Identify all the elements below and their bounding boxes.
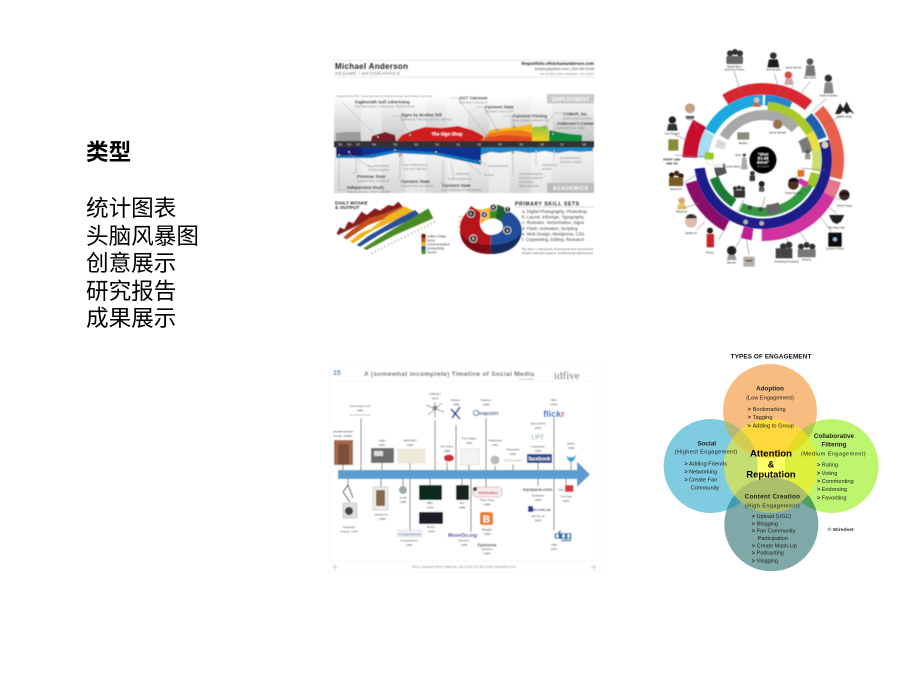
events below the line: digg (551, 542, 557, 546)
events above the line: radio (379, 438, 386, 442)
text: collaborative filtering: Voting (822, 471, 837, 477)
text: attention and reputation: Attention (750, 448, 792, 458)
text block: primary skill sets: e. Web Design, Wordpress, CSS (522, 232, 585, 236)
events below the line: telegraph (343, 525, 356, 529)
legend: ribbon chart: productivity (427, 246, 444, 250)
events above the line: Wikipedia (488, 438, 502, 442)
events below the line: 1998 (461, 543, 468, 547)
frame and header: A (somewhat incomplete) Timeline of Social Media (364, 371, 534, 378)
events below the line: telephone (374, 512, 388, 516)
events above the line: SecondLife (530, 422, 546, 426)
legend: ribbon chart: focus (427, 238, 435, 242)
events above the line: flickr (551, 398, 557, 402)
text: collaborative filtering: > (817, 495, 821, 501)
timeline band with years: '06 (540, 142, 544, 146)
text: collaborative filtering (801, 433, 866, 501)
academics labels: ELECTRONIC PUBLISHING (442, 188, 482, 192)
text: collaborative filtering: > (817, 463, 821, 469)
text: attention and reputation: & (768, 459, 775, 469)
text: collaborative filtering: Filtering (821, 442, 847, 449)
logos and images below the line: digg (554, 530, 572, 542)
text block: list of infographic types: 创意展示 (86, 251, 176, 276)
text: collaborative filtering: Commenting (822, 479, 854, 485)
events below the line: epinions (481, 547, 493, 551)
outer person labels: Bob Dylan (804, 76, 817, 80)
logos and images below the line: CompuServe (398, 532, 421, 536)
academics labels: WRITING (456, 172, 470, 176)
academics labels: PHOTOGRAPHY (519, 176, 543, 180)
outer person labels: Dance Stage (837, 114, 853, 118)
chart: daily intake and output ribbons (335, 200, 435, 253)
text: adoption: > (748, 407, 752, 413)
chart background with year columns (334, 95, 594, 193)
text block: primary skill sets: c. Illustrator, Vectorization, Signs (522, 220, 584, 225)
timeline arrow (338, 462, 590, 487)
academics labels: WEB DESIGN (519, 184, 539, 188)
events above the line: 2003 (535, 449, 542, 453)
header: name and contact (334, 60, 595, 78)
outer person labels: Chuck Berry (726, 164, 741, 168)
text: social: Adding Friends (689, 461, 727, 467)
logos and images below the line: del.icio.us (531, 507, 552, 512)
logos and images above the line (334, 402, 577, 465)
events below the line (340, 494, 572, 556)
employment labels: MARKETING / WEB (557, 126, 585, 130)
employment labels: Lapsed Area Plot : Area represents relative energy expenditure over time (336, 94, 433, 98)
events below the line: 2003 (535, 518, 542, 522)
events above the line: pneumatic post (350, 404, 370, 408)
circle: content creation (724, 477, 818, 571)
text block: primary skill sets: PRIMARY SKILL SETS (515, 202, 580, 208)
logos and images above the line: LIFE (532, 435, 544, 441)
text: content creation: Vlogging (757, 558, 778, 564)
events below the line: 1999 (484, 532, 491, 536)
people portraits (663, 49, 854, 267)
logos and images above the line: napster (479, 411, 500, 417)
outer person labels: START 1980 (663, 158, 681, 162)
header: name and contact: tunyboy@yahoo.com | 304-382-5145 (535, 67, 594, 71)
timeline band with years: '96 (347, 142, 351, 146)
timeline band with years: '03 (477, 142, 481, 146)
logos and images below the line (343, 485, 574, 548)
academics tag (547, 183, 594, 193)
outer person labels: Stevie Wonder (769, 130, 786, 134)
logos and images below the line: MoveOn.org (448, 533, 477, 539)
employment area plot: The Sign Shop (432, 132, 463, 136)
text block: primary skill sets: f. Copywriting, Editing, Research (522, 237, 585, 242)
academics labels: INDESIGN (542, 163, 557, 167)
timeline band with years: '99 (393, 142, 397, 146)
outer person labels: Nirvana (802, 258, 812, 262)
events below the line: ~ 1890 (376, 517, 386, 521)
header: name and contact: HC 63 BOX 2340 | ROMNEY, WV 26757 (540, 72, 594, 76)
outer person labels: Wu-Tang Clan (828, 225, 846, 229)
chart: daily intake and output ribbons: & OUTPUT (335, 205, 360, 211)
academics labels: VISUAL BASIC / PHOTOSHOP (347, 190, 390, 194)
text block: primary skill sets (515, 202, 594, 255)
outer person labels: James Brown (785, 65, 802, 69)
outer person labels: Snoop Dogg (837, 204, 852, 208)
employment labels: Anderson's Corner (557, 121, 594, 126)
events below the line: 2005 (563, 499, 570, 503)
start gap (683, 160, 723, 168)
outer person labels: Smashing Pumpkins (775, 260, 799, 264)
inner ring segments (689, 86, 837, 234)
text: content creation: > (752, 514, 755, 520)
logos and images below the line: myspace.com (523, 487, 552, 492)
outer person labels: Madonna (676, 210, 688, 214)
text: content creation (745, 493, 800, 564)
employment labels: Fairmont Printing (513, 114, 548, 118)
events below the line: IRC (459, 501, 465, 505)
text: content creation: > (752, 558, 755, 564)
events above the line: 1985 (444, 449, 451, 453)
events below the line: CompuServe (400, 538, 418, 542)
events above the line: 2004 (551, 402, 558, 406)
chart: 3D donut of skill sets: b (472, 236, 475, 241)
legend: ribbon chart (422, 234, 450, 254)
text: social: Community (691, 486, 719, 492)
text block: list of infographic types: 成果展示 (86, 306, 176, 331)
events below the line: 1988 (459, 506, 466, 510)
logos and images below the line: thirdvoice (478, 490, 498, 495)
text block: primary skill sets: Height indicates approx. professional deployment (522, 251, 593, 255)
academics labels: VECTORIZATION (403, 163, 428, 167)
academics labels: Fairmont State (442, 183, 471, 188)
rings (657, 54, 869, 266)
academics labels: GRADUATION (488, 164, 508, 168)
employment labels: Fairmont State (485, 104, 514, 110)
academics labels: TYPOGRAPHY (368, 168, 390, 172)
events above the line: 2002 (510, 452, 517, 456)
header: name and contact: Michael Anderson (335, 62, 408, 71)
academics area plot (336, 147, 593, 165)
employment labels: IADT Fairmont (459, 96, 488, 100)
outer person labels: Prince (706, 250, 714, 254)
logos and images above the line: W (444, 456, 451, 463)
events below the line: YouTube (560, 494, 572, 498)
employment labels: MAGAZINE DESIGN (563, 116, 592, 120)
academics labels: ILLUSTRATOR (368, 164, 390, 168)
events below the line: Blogger (482, 528, 492, 532)
center badge (750, 146, 776, 174)
events below the line: 1999 (484, 502, 491, 506)
academics labels: AUDIO (542, 167, 552, 171)
text: collaborative filtering: (Medium Engagement) (801, 452, 866, 458)
text: content creation: Upload (UGC) (757, 514, 792, 520)
logos and images below the line: B (483, 514, 490, 526)
text: social: > (684, 469, 688, 475)
chart: 3D donut of skill sets: a (506, 228, 509, 233)
events below the line: France, 1792 (340, 530, 358, 534)
timeline band with years: '08 (582, 142, 586, 146)
events below the line: 2004 (551, 547, 558, 551)
outer person labels: Public Enemy (785, 191, 802, 195)
timeline band with years: '05 (519, 142, 523, 146)
academics labels: Independent Study (347, 185, 385, 190)
timeline band with years: '00 (414, 142, 418, 146)
events above the line: USENET (429, 392, 441, 396)
academics labels: COMPUTER SCIENCE (357, 179, 389, 183)
outer person labels: Sound of Silver (826, 246, 844, 250)
timeline band with years: '04 (498, 142, 502, 146)
events above the line: Friendster (506, 448, 520, 452)
outer person labels: Vanilla Ice (685, 231, 698, 235)
text: collaborative filtering: Rating (822, 463, 838, 469)
timeline band with years: '07 (560, 142, 564, 146)
footer address (332, 564, 597, 570)
events above the line: 1969 (407, 443, 414, 447)
text block: list of infographic types: 头脑风暴图 (86, 224, 199, 249)
employment labels: SCORECARDS / SIGNAGE / PERIODICAL (355, 104, 415, 108)
outer person labels: Blondie (727, 260, 737, 264)
text: content creation: Create Mash-Up (757, 543, 797, 549)
connector lines (675, 72, 843, 255)
text: social: (Highest Engagement) (675, 449, 737, 455)
circle: adoption (723, 364, 817, 458)
academics labels: WORDPRESS (560, 156, 580, 160)
frame and header: idfive (554, 370, 580, 382)
events above the line: 2006 (568, 446, 575, 450)
employment labels: PRE-PRESS OPERATOR (513, 118, 550, 122)
events above the line: 2001 (492, 443, 499, 447)
employment labels: ADJUNCT FACULTY (485, 110, 514, 114)
events above the line: 1865 (357, 408, 364, 412)
events above the line: 1891 (379, 443, 386, 447)
academics labels: PHOTOGRAPHY (448, 177, 472, 181)
frame and header (330, 365, 600, 572)
outer person labels: God Only Knows (724, 68, 745, 72)
circle: collaborative filtering (785, 419, 879, 513)
academics labels: INFOGRAPHICS (519, 172, 543, 176)
text: adoption: > (748, 423, 752, 429)
events below the line: email (399, 496, 407, 500)
chart: 3D donut of skill sets: d (483, 212, 486, 217)
text: adoption: Adoption (756, 386, 784, 393)
academics labels: COLOR THEORY (403, 167, 428, 171)
center badge: "What (758, 152, 769, 156)
text: adoption: Bookmarking (753, 407, 786, 413)
text: content creation: Blogging (757, 521, 778, 527)
employment labels: COMAR, Inc. (563, 112, 588, 116)
employment tag: EMPLOYMENT (552, 97, 589, 103)
panel: Michael Anderson resume infographic (334, 60, 595, 255)
employment labels (336, 94, 594, 130)
frame and header: 15 (333, 370, 341, 377)
outer person labels: Beatles (739, 141, 748, 145)
text: content creation: Content Creation (745, 493, 800, 500)
text block: list of infographic types: 统计图表 (86, 196, 176, 221)
legend: ribbon chart: communication (427, 242, 450, 246)
text block: list of infographic types: 研究报告 (86, 279, 176, 304)
timeline band with years: '02 (456, 142, 460, 146)
outer ring segments (657, 54, 869, 266)
events above the line: 2003 (535, 426, 542, 430)
events above the line: Persia, 550BC (333, 434, 354, 438)
academics labels: COMPUTER SCIENCE (401, 184, 433, 188)
text: social: Social (697, 440, 716, 447)
events above the line: postal service (333, 430, 353, 434)
employment area plot (336, 124, 582, 141)
timeline band with years (334, 141, 594, 148)
academics tag: ACADEMICS (553, 186, 589, 192)
events above the line: listserv (451, 398, 461, 402)
circle: social (664, 419, 758, 513)
logos and images below the line: You (558, 488, 564, 492)
footer address: 300 e. redwood street baltimore, md 21202 410.837.0050 www.idfive.com (412, 565, 516, 569)
events below the line: Third Voice (479, 498, 495, 502)
timeline band with years: '97 (356, 142, 360, 146)
credit: Wiredset: © Wiredset (828, 526, 854, 533)
timeline band with years: '01 (435, 142, 439, 146)
outer person labels: Moby (687, 117, 694, 121)
center badge: 50 songs of (757, 166, 769, 168)
text: social: > (684, 461, 688, 467)
academics labels: Potomac State (357, 174, 386, 179)
circle: attention and reputation core (724, 418, 818, 513)
outer person labels: Beach Boys (727, 65, 742, 69)
academics labels: Fairmont State (401, 179, 430, 184)
outer person labels: Jimi Hendrix (766, 68, 781, 72)
employment tag (547, 94, 594, 104)
text: adoption: Adding to Group (753, 423, 794, 429)
events above the line (333, 392, 575, 456)
center badge: It's All (758, 156, 768, 160)
text: content creation: Fan Community (757, 529, 796, 535)
events below the line: 1978 (427, 506, 434, 510)
text: collaborative filtering: > (817, 479, 821, 485)
text: content creation: > (752, 521, 755, 527)
panel: timeline of social media (330, 365, 600, 572)
header: name and contact: RÉSUMÉ / INFOGRAPHICS (335, 70, 400, 76)
text: adoption: (Low Engagement) (746, 396, 794, 402)
events below the line: 1999 (484, 552, 491, 556)
text: social: Create Fan (689, 478, 717, 484)
logos and images below the line: Epinions (478, 542, 497, 548)
events below the line: MoveOn (458, 538, 470, 542)
timeline band with years: '95 (338, 142, 342, 146)
text: content creation: (High Engagement) (745, 503, 800, 509)
chart: 3D donut of skill sets (458, 204, 522, 254)
text: content creation: Podcasting (757, 551, 784, 557)
chart: 3D donut of skill sets: c (470, 211, 473, 216)
employment labels: SIGNAGE / INSTALLATION / RETAIL (401, 118, 453, 122)
events below the line: MUD1 (427, 525, 436, 529)
events below the line: 1968 (400, 500, 407, 504)
chart: 3D donut of skill sets: f (507, 207, 509, 212)
academics labels: DIGITAL VIDEO (560, 160, 583, 164)
text: adoption: Tagging (753, 415, 772, 421)
text: content creation: > (752, 543, 755, 549)
stems (343, 418, 571, 532)
academics labels: FLASH (484, 173, 494, 177)
text block: primary skill sets: Pie slice = represents % personal time investment (522, 247, 593, 251)
employment labels: ADJUNCT FACULTY (459, 100, 488, 104)
events above the line: twitter (567, 442, 575, 446)
text block: list of infographic types (86, 196, 199, 331)
events above the line: Facebook (531, 444, 545, 448)
events below the line: 1978 (428, 530, 435, 534)
events above the line: 1979 (432, 396, 439, 400)
events above the line: 1986 (453, 402, 460, 406)
text block: primary skill sets: a. Digital Photography, Photoshop (522, 209, 588, 214)
text: adoption: > (748, 415, 752, 421)
text: collaborative filtering: Collaborative (814, 433, 855, 440)
timeline band with years: '98 (372, 142, 376, 146)
text: content creation: > (752, 529, 755, 535)
outer person labels: Aretha Franklin (819, 94, 838, 98)
text: collaborative filtering: Endorsing (822, 487, 847, 493)
events below the line: MySpace (532, 494, 545, 498)
legend: ribbon chart: coffee intake (427, 234, 446, 238)
employment labels: Eaglesmith Golf Advertising (355, 100, 410, 104)
events below the line: BBS (427, 501, 433, 505)
overlaps between neighbouring circles (724, 421, 816, 510)
outer person labels: AND 4/8 (666, 161, 678, 165)
text: social: > (684, 478, 688, 484)
text: content creation: > (752, 551, 755, 557)
text block: primary skill sets: d. Flash, Animation, Scripting (522, 226, 578, 231)
events below the line: del.icio.us (531, 514, 545, 518)
text: social: Networking (689, 469, 717, 475)
panel: types of engagement venn diagram (664, 353, 879, 571)
text: collaborative filtering: > (817, 471, 821, 477)
events above the line: ARPANET (403, 438, 417, 442)
events above the line: 1999 (483, 402, 490, 406)
logos and images above the line: Friendster (504, 458, 523, 462)
text: attention and reputation: Reputation (746, 470, 796, 480)
events below the line: 1969 (406, 543, 413, 547)
employment labels: Signs by Brother Bill (401, 112, 442, 118)
chart: 3D donut of skill sets: e (492, 205, 495, 210)
events above the line: The WELL (440, 444, 454, 448)
events above the line: 1994 (466, 441, 473, 445)
logos and images above the line: facebook (529, 456, 551, 462)
panel: What It's All About radial chart (657, 49, 869, 267)
outer person labels: Elvis (736, 153, 742, 157)
text: content creation: Participation (758, 536, 788, 542)
text: collaborative filtering: Favoriting (822, 495, 846, 501)
logos and images above the line: flickr (543, 409, 565, 419)
events below the line: 2003 (535, 498, 542, 502)
events above the line: The Palace (461, 436, 477, 440)
frame and header: not to scale (519, 377, 534, 381)
heading: 类型: 类型 (86, 140, 131, 165)
text block: primary skill sets: b. Layout, InDesign, Typography (522, 214, 585, 220)
events above the line: Napster (481, 398, 491, 402)
header: name and contact: theportfolio.ofmichaelanderson.com (521, 61, 594, 66)
outer person labels (663, 65, 853, 264)
middle ring segments (675, 72, 851, 248)
text: attention and reputation (746, 448, 796, 480)
text: adoption (746, 386, 794, 429)
academics labels (347, 156, 583, 194)
academics labels: INDESIGN (519, 180, 534, 184)
leader lines (338, 98, 562, 190)
text: social (675, 440, 737, 492)
legend: ribbon chart: humor (427, 250, 437, 254)
outer person labels: Soul Singers (665, 131, 681, 135)
diagram title: TYPES OF ENGAGEMENT (731, 353, 811, 360)
gray core ring segments (699, 96, 827, 224)
text: collaborative filtering: > (817, 487, 821, 493)
center badge: About" (757, 160, 769, 164)
outer person labels: Jackson 5 (670, 187, 682, 191)
chart: daily intake and output ribbons: DAILY INTAKE (335, 200, 368, 206)
